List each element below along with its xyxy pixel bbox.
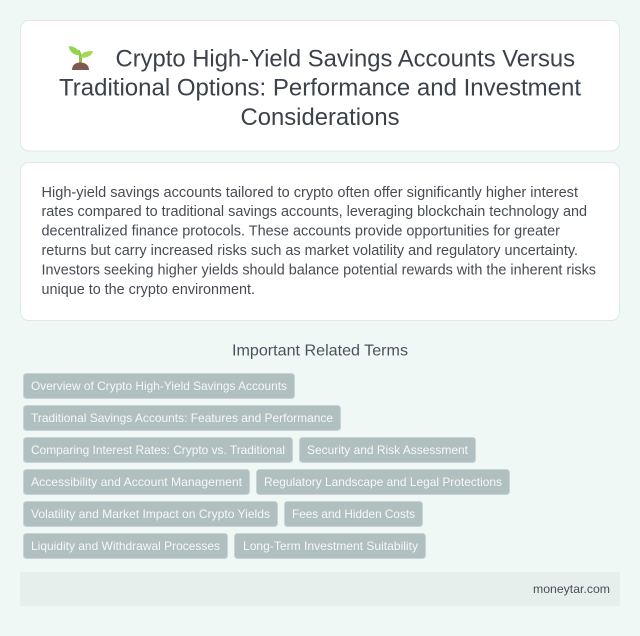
footer: source: moneytar.com bbox=[533, 582, 610, 596]
tag: fees bbox=[284, 502, 422, 526]
tag: regulatory: Regulatory Landscape and Legal Protections bbox=[264, 475, 502, 489]
tag: long-term bbox=[234, 534, 426, 558]
text block: description: rates compared to traditional savings accounts, leveraging blockchain technology and bbox=[42, 204, 587, 220]
tag: traditional savings: Traditional Savings Accounts: Features and Performance bbox=[31, 411, 333, 425]
tag: accessibility bbox=[24, 470, 250, 494]
icon: seedling bbox=[69, 46, 93, 70]
text block: description: returns but carry increased risks such as market volatility and regulatory uncertainty. bbox=[42, 243, 578, 259]
tag: security: Security and Risk Assessment bbox=[307, 443, 469, 457]
tag: volatility: Volatility and Market Impact on Crypto Yields bbox=[31, 507, 270, 521]
title bbox=[59, 46, 581, 131]
text block: description: decentralized finance protocols. These accounts provide opportunities for greater bbox=[42, 224, 560, 240]
tag list bbox=[24, 374, 510, 558]
tag: security bbox=[300, 438, 476, 462]
heading: related terms: Important Related Terms bbox=[232, 343, 408, 360]
tag: interest rates bbox=[24, 438, 292, 462]
text block: description: Investors seeking higher yields should balance potential rewards with the inherent risks bbox=[42, 263, 596, 279]
tag: interest rates: Comparing Interest Rates: Crypto vs. Traditional bbox=[31, 443, 285, 457]
tag: overview bbox=[24, 374, 294, 398]
tag: fees: Fees and Hidden Costs bbox=[292, 507, 415, 521]
footer bbox=[20, 572, 620, 606]
text block: description: High-yield savings accounts tailored to crypto often offer significantly higher interest bbox=[42, 185, 578, 201]
title: Traditional Options: Performance and Investment bbox=[59, 75, 581, 102]
tag: regulatory bbox=[256, 470, 510, 494]
title: Crypto High-Yield Savings Accounts Versus bbox=[116, 46, 575, 73]
tag: accessibility: Accessibility and Account Management bbox=[31, 475, 243, 489]
text block: description bbox=[42, 185, 596, 298]
tag: traditional savings bbox=[24, 406, 340, 430]
panel: title card bbox=[20, 20, 620, 151]
tag: volatility bbox=[24, 502, 278, 526]
tag: long-term: Long-Term Investment Suitability bbox=[243, 539, 418, 553]
tag: liquidity bbox=[24, 534, 228, 558]
panel: description bbox=[20, 162, 620, 320]
tag: liquidity: Liquidity and Withdrawal Processes bbox=[31, 539, 220, 553]
tag: overview: Overview of Crypto High-Yield Savings Accounts bbox=[31, 379, 287, 393]
text block: description: unique to the crypto environment. bbox=[42, 282, 255, 298]
title: Considerations bbox=[240, 104, 400, 131]
